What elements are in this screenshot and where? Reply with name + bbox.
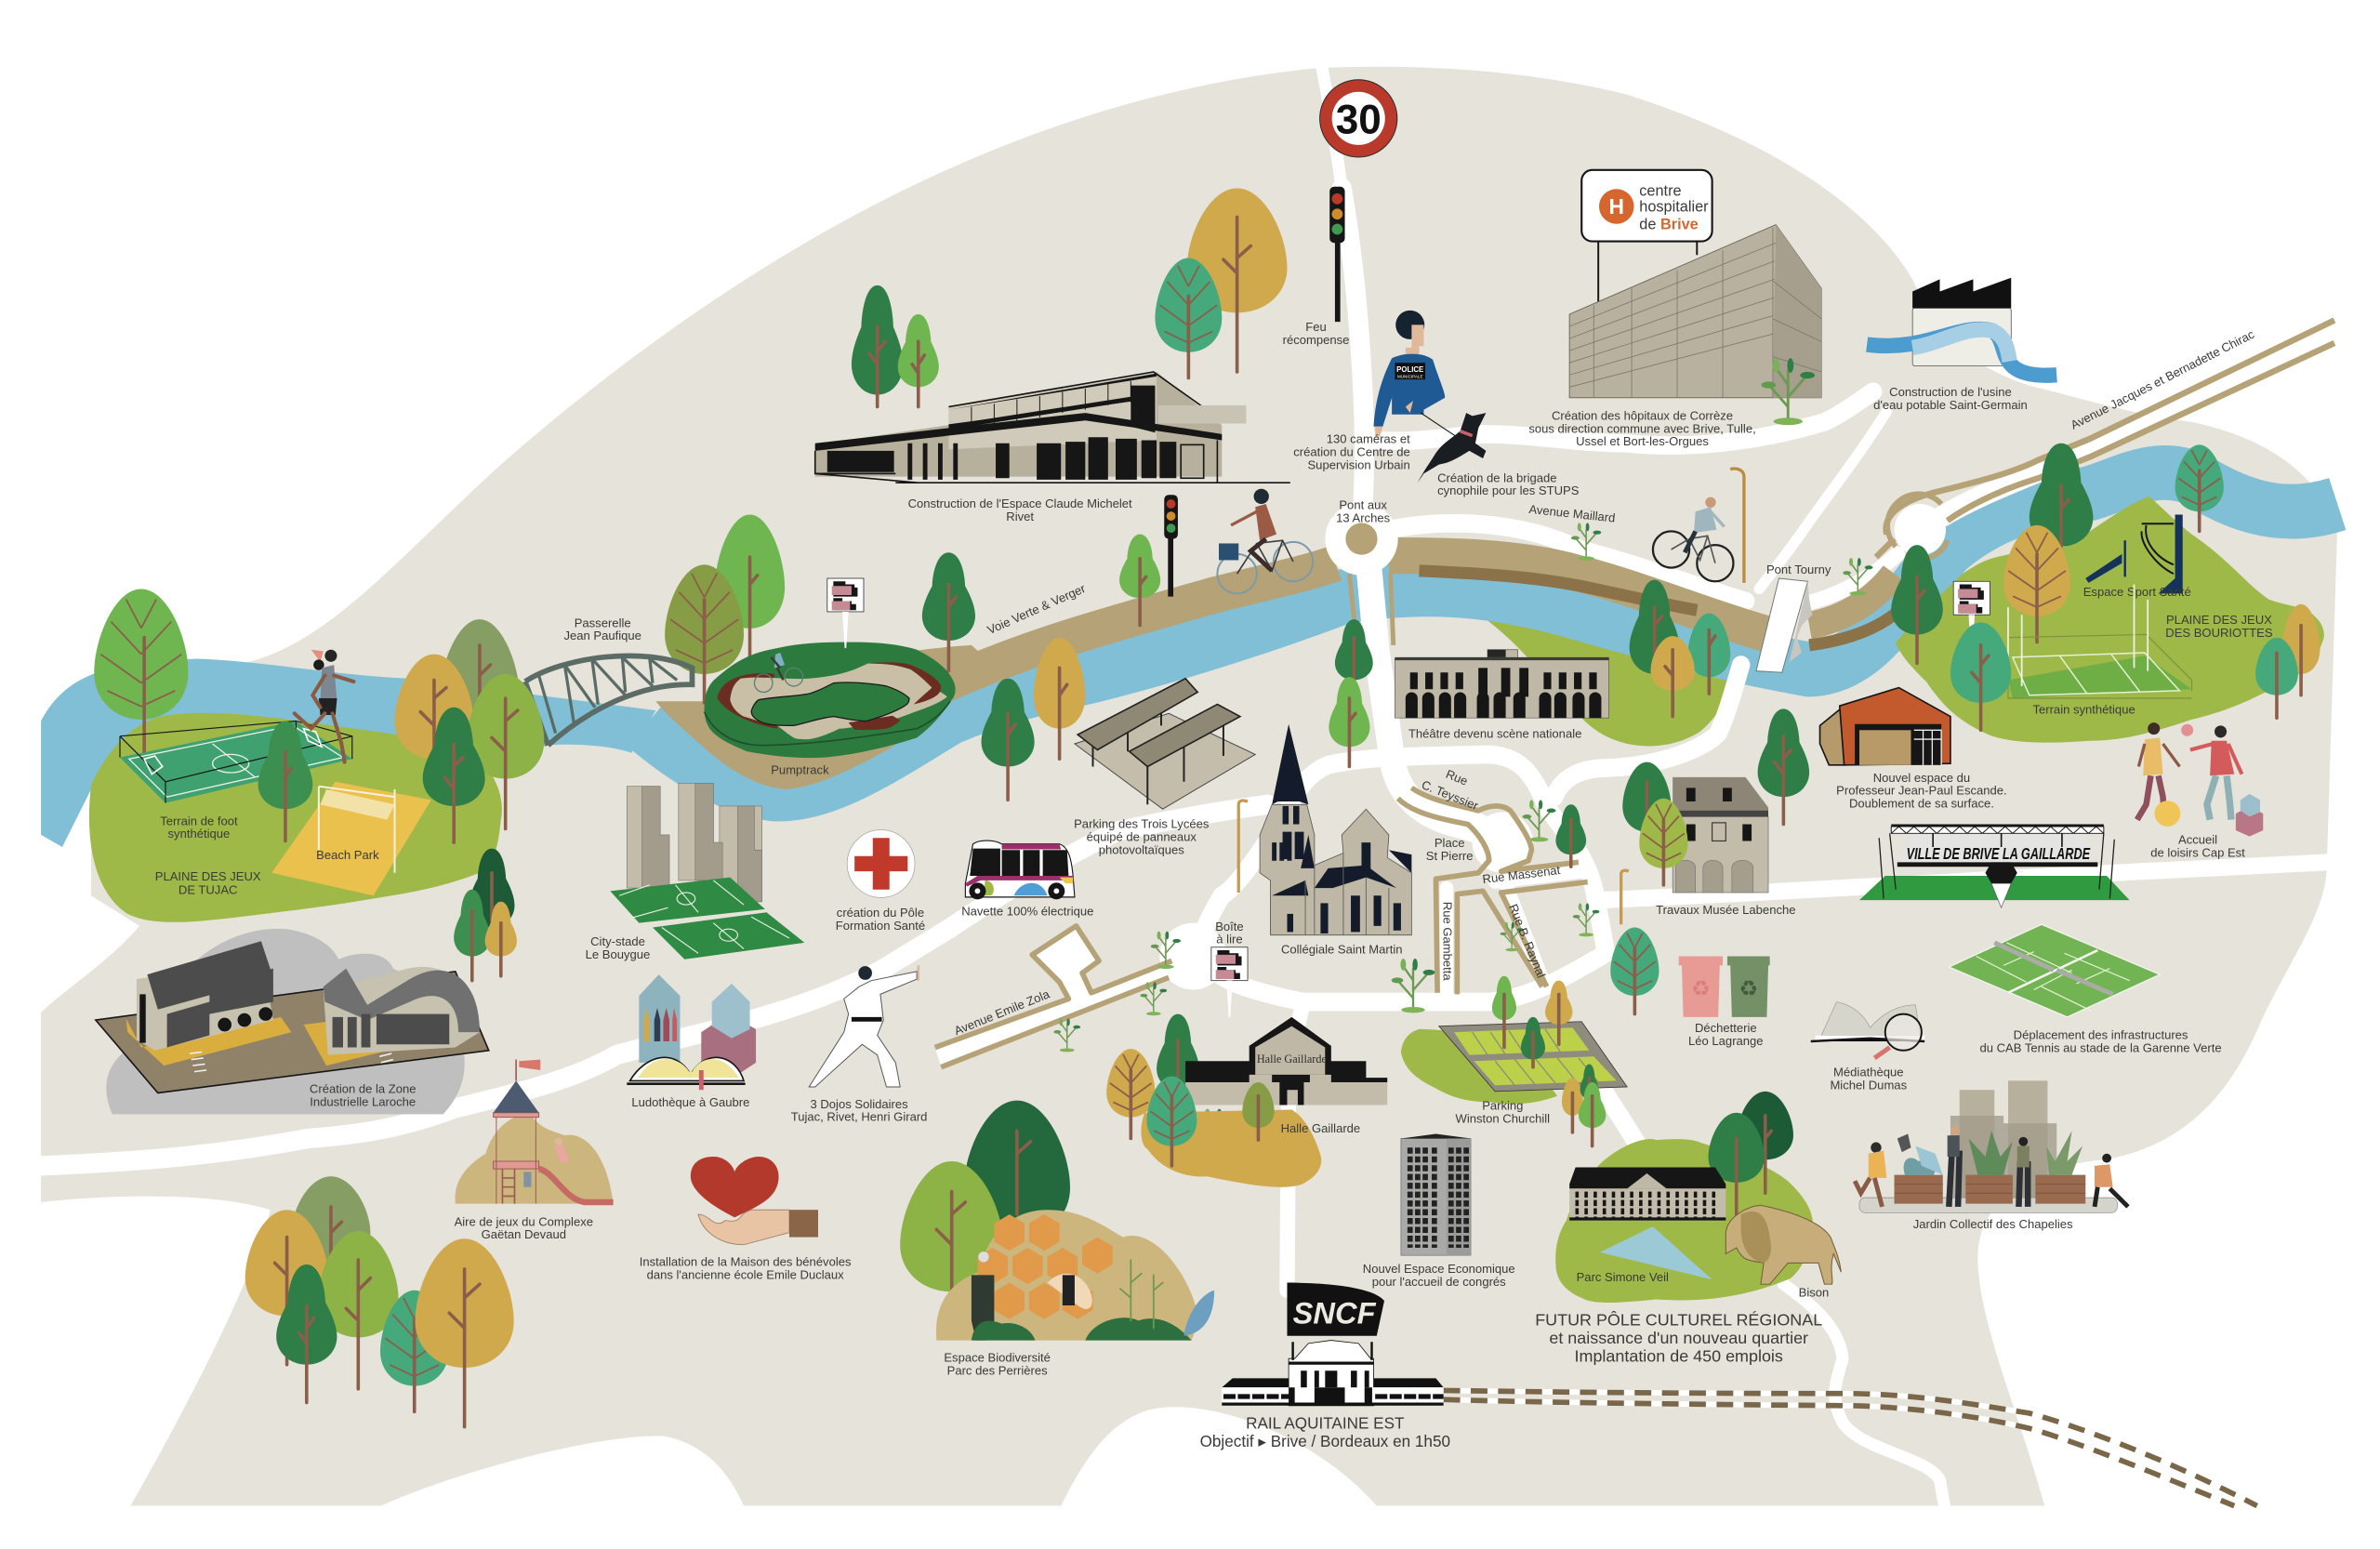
Médiathèque Michel Dumas [1811,1002,1924,1092]
water plant Saint-Germain: d'eau potable Saint-Germain [1873,398,2028,412]
tree [440,619,520,744]
tree [900,1161,1003,1291]
boîte à lire sign [827,578,864,648]
Espace Biodiversité Parc des Perrières: Parc des Perrières [947,1363,1048,1377]
Nouvel espace du Professeur Escande: Nouvel espace du [1873,771,1970,785]
label: Plaine des jeux des Bouriottes: DES BOURIOTTES [2165,626,2273,640]
Zone industrielle Laroche: Création de la Zone [310,1081,416,1095]
Nouvel espace du Professeur Escande [1820,688,2007,811]
street labels in the town centre: Rue B. Raynal [1506,902,1549,980]
tree [922,552,975,671]
tree [94,589,188,756]
road label: Avenue Jacques et Bernadette Chirac: Avenue Jacques et Bernadette Chirac [2069,326,2257,432]
tree [1492,976,1516,1048]
tennis courts: Déplacement des infrastructures [2014,1028,2188,1042]
tree [1119,535,1160,626]
beach park: Beach Park [316,848,379,862]
Travaux Musée Labenche: Travaux Musée Labenche [1656,903,1795,917]
plant [1196,1109,1239,1163]
solar parking: Trois Lycées [1074,679,1255,856]
tennis courts: du CAB Tennis au stade de la Garenne Verte [1979,1040,2222,1054]
Halle Gaillarde: Halle Gaillarde [1281,1121,1360,1135]
Collégiale Saint Martin [1260,724,1411,956]
Maison des bénévoles heart and hand: Installation de la Maison des bénévoles [640,1255,852,1269]
street labels in the town centre: St Pierre [1426,849,1474,863]
heading: Futur pôle culturel régional [1535,1309,1822,1365]
theatre [1395,650,1609,740]
tree [1155,258,1222,378]
tree [1106,1049,1155,1138]
tree [1545,981,1572,1044]
heading: Futur pôle culturel régional: et naissance d'un nouveau quartier [1549,1329,1808,1347]
river Corrèze [41,472,2337,847]
police officer and dog: cynophile pour les STUPS [1437,483,1580,497]
street labels in the town centre: Rue Massenat [1482,863,1561,886]
tree [898,314,939,407]
bridge: Pont Tourny [1756,578,1812,672]
tree [1639,799,1687,885]
Centre hospitalier [1528,170,1821,448]
Parking Winston Churchill: Parking [1482,1098,1523,1112]
label: Plaine des jeux des Bouriottes: PLAINE DES JEUX [2166,613,2272,627]
tree [1650,636,1695,717]
police officer and dog: Création de la brigade [1437,470,1557,484]
Avenue Chirac double road and roundabout [1876,320,2334,559]
speed limit sign 30: 30 [1336,98,1382,143]
tree [1580,1064,1598,1099]
tree [1891,545,1943,663]
Centre hospitalier: de Brive [1639,217,1699,233]
railway tracks [1444,1390,2257,1506]
street lamp [1730,469,1744,583]
plant [1140,982,1167,1015]
création du Pôle Formation Santé: Formation Santé [836,919,925,933]
Travaux Musée Labenche [1656,777,1795,917]
police officer and dog: MUNICIPALE [1397,375,1423,379]
tree [715,514,785,669]
tree [1329,677,1369,766]
création du Pôle Formation Santé: création du Pôle [837,906,924,920]
speed limit sign 30 [1320,80,1397,157]
tree [469,849,514,928]
road: Avenue Emile Zola [935,926,1171,1067]
label: Pont aux 13 Arches [1336,498,1391,525]
tree [1610,928,1659,1014]
traffic light [1164,495,1178,597]
Centre hospitalier: centre [1639,183,1682,200]
bridge: Passerelle Jean Paufique [525,616,693,746]
road: Avenue Emile Zola: Avenue Emile Zola [952,986,1052,1038]
Nouvel Espace Economique: Nouvel Espace Economique [1363,1262,1515,1276]
Ludothèque à Gaubre [627,974,756,1109]
Aire de jeux Gaëtan Devaud: Aire de jeux du Complexe [455,1214,593,1228]
Halle Gaillarde green-gold ground [1141,1109,1321,1187]
stade: Ville de Brive la Gaillarde: VILLE DE BRIVE LA GAILLARDE [1907,844,2091,863]
Ludothèque à Gaubre: Ludothèque à Gaubre [631,1095,749,1109]
Nouvel espace du Professeur Escande: Professeur Jean-Paul Escande. [1836,784,2007,798]
Parking Winston Churchill [1439,1022,1627,1125]
tree [423,708,485,842]
green area: plaine de Tujac [89,713,502,922]
green area: plaine des Bouriottes [1896,496,2324,743]
SNCF station: RAIL AQUITAINE EST [1246,1413,1405,1432]
tree [2175,444,2224,531]
tree [245,1210,328,1365]
tree [1242,1082,1275,1140]
Médiathèque Michel Dumas: Michel Dumas [1830,1078,1908,1092]
street labels in the town centre [1420,767,1561,981]
tree [1709,1113,1765,1214]
Centre hospitalier: sous direction commune avec Brive, Tulle, [1528,421,1756,435]
tree [1687,614,1730,694]
Terrain synthétique: Terrain synthétique [2032,702,2135,716]
bison: Bison [1799,1285,1829,1299]
cyclist on Avenue Maillard [1653,497,1733,581]
tree [2255,638,2298,718]
label: Plaine des jeux de Tujac [155,869,261,897]
tree [454,890,490,981]
tree [1758,708,1809,825]
building: parc Simone Veil [1569,1167,1726,1221]
Déchetterie Léo Lagrange: ♻ [1739,976,1758,1000]
tree [467,674,544,828]
police officer and dog: création du Centre de [1293,445,1410,459]
street lamp [1238,801,1248,893]
bridge: Passerelle Jean Paufique: Jean Paufique [563,629,641,642]
tree [1157,1014,1199,1101]
tree [258,721,312,841]
SNCF station [1200,1283,1450,1450]
tree [1950,622,2011,730]
heading: Futur pôle culturel régional: Implantation de 450 emplois [1575,1346,1783,1365]
tree [485,902,517,976]
tree [2282,604,2320,695]
Espace Biodiversité Parc des Perrières [936,1210,1214,1377]
plant [1151,932,1181,969]
street labels in the town centre: Place [1435,836,1464,850]
tree [2003,525,2070,642]
Nouvel Espace Economique: pour l'accueil de congrés [1372,1275,1506,1289]
Boîte à lire [1211,920,1248,1017]
tree [1630,580,1680,674]
label: Plaine des jeux de Tujac: DE TUJAC [178,883,237,897]
SNCF station: SNCF [1293,1296,1377,1331]
City-stade Le Bouygue: City-stade [590,934,645,948]
tree [1622,762,1672,832]
Aire de jeux Gaëtan Devaud [455,1060,614,1241]
Boîte à lire at Bouriottes [1953,581,1990,651]
pumptrack: Pumptrack [771,763,829,777]
police officer and dog: POLICE [1396,365,1423,374]
Espace Sport Santé: Espace Sport Santé [2083,585,2191,599]
3 Dojos Solidaires: 3 Dojos Solidaires [811,1097,908,1111]
Espace Sport Santé [2083,514,2191,599]
street labels in the town centre: Rue Gambetta [1441,902,1455,981]
bridge: Passerelle Jean Paufique: Passerelle [575,616,631,629]
police officer and dog: Supervision Urbain [1307,457,1410,471]
Halle Gaillarde [1185,1017,1387,1135]
street labels in the town centre: Rue [1444,767,1470,788]
label: Plaine des jeux de Tujac: PLAINE DES JEUX [155,869,261,883]
Parc Simone Veil [1555,1139,1813,1303]
traffic light: feu récompense: Feu [1305,320,1327,334]
Parking Winston Churchill: Winston Churchill [1456,1111,1550,1125]
traffic light: feu récompense [1283,187,1349,347]
foot field Tujac: Terrain de foot [160,814,238,827]
tree [1146,1077,1197,1166]
Centre hospitalier: hospitalier [1639,199,1709,216]
tree [416,1238,514,1427]
solar parking: Trois Lycées: photovoltaïques [1099,842,1184,856]
Déchetterie Léo Lagrange: ♻ [1691,976,1711,1000]
plant [1573,903,1599,936]
building: Espace Claude Michelet Rivet: Construction de l'Espace Claude Michelet [908,496,1132,510]
Jardin Collectif des Chapelies: Jardin Collectif des Chapelies [1913,1217,2073,1231]
Déchetterie Léo Lagrange [1679,957,1770,1048]
tree [1562,1078,1583,1132]
heading: Futur pôle culturel régional: FUTUR PÔLE CULTUREL RÉGIONAL [1535,1309,1822,1329]
solar parking: Trois Lycées: équipé de panneaux [1087,829,1197,843]
solar parking: Trois Lycées: Parking des Trois Lycées [1074,817,1210,831]
police officer and dog: 130 caméras et [1327,432,1410,446]
tree [1335,619,1373,680]
label: Plaine des jeux des Bouriottes [2165,613,2273,640]
Jardin Collectif des Chapelies [1855,1080,2128,1231]
label: Pont aux 13 Arches: 13 Arches [1336,511,1391,525]
3 Dojos Solidaires: Tujac, Rivet, Henri Girard [791,1110,927,1124]
Zone industrielle Laroche [96,929,489,1114]
plant [1501,922,1524,951]
création du Pôle Formation Santé [836,830,925,933]
Boîte à lire: à lire [1216,933,1243,947]
Déchetterie Léo Lagrange: Léo Lagrange [1688,1034,1764,1048]
Nouvel espace du Professeur Escande: Doublement de sa surface. [1849,797,1994,811]
street labels in the town centre: C. Teyssier [1420,777,1481,813]
foot field Tujac: synthétique [168,827,230,841]
plant [1571,523,1601,561]
Centre hospitalier: H [1609,194,1624,218]
green area: parking Churchill [1401,1029,1557,1104]
tree [964,1101,1070,1238]
tree [318,1231,399,1389]
tree [291,1176,370,1264]
tree [1187,188,1287,372]
navette électrique: Navette 100% électrique [961,904,1093,918]
tree [1034,638,1085,759]
City-stade Le Bouygue: Le Bouygue [586,947,650,961]
tree [1555,804,1586,867]
tree [665,564,744,703]
building: Espace Claude Michelet Rivet: Rivet [1006,510,1034,523]
tree [1579,1082,1606,1146]
Déchetterie Léo Lagrange: Déchetterie [1695,1021,1757,1035]
street lamp [1621,870,1629,924]
tree [276,1264,337,1403]
bison [1726,1205,1841,1299]
Accueil de loisirs Cap Est: Accueil [2178,833,2217,847]
pumptrack [705,642,956,777]
Maison des bénévoles heart and hand: dans l'ancienne école Emile Duclaux [647,1267,844,1281]
water plant Saint-Germain [1867,278,2056,412]
cyclist on Voie Verte [1217,489,1313,593]
SNCF station: Objectif ▸ Brive / Bordeaux en 1h50 [1200,1432,1450,1450]
foot field Tujac [120,721,352,841]
tree [380,1291,448,1411]
plant [1843,558,1873,595]
Accueil de loisirs Cap Est: de loisirs Cap Est [2150,846,2245,860]
tree [2030,444,2093,547]
tree [395,655,473,759]
plant [1523,800,1555,841]
tree [1738,1092,1793,1193]
label: Voie Verte et Verger: Voie Verte & Verger [985,581,1088,637]
Médiathèque Michel Dumas: Médiathèque [1833,1066,1904,1079]
ground: pumptrack base [655,645,985,789]
road label: Avenue Maillard: Avenue Maillard [1528,502,1616,525]
Voie Verte and Pont aux 13 Arches [941,502,1896,686]
Espace Biodiversité Parc des Perrières: Espace Biodiversité [944,1350,1051,1364]
stade: Ville de Brive la Gaillarde [1859,825,2130,907]
Centre hospitalier: Ussel et Bort-les-Orgues [1576,434,1709,448]
plant icon near hospital [1762,358,1815,425]
label: Pont Tourny: Pont Tourny [1766,563,1831,576]
tree [982,679,1035,800]
Nouvel Espace Economique [1363,1134,1515,1289]
tree [852,285,903,407]
label: Pont aux 13 Arches: Pont aux [1339,498,1387,512]
Parc Simone Veil: Parc Simone Veil [1577,1270,1669,1284]
City-stade Le Bouygue [586,783,804,961]
3 Dojos Solidaires [791,965,927,1124]
Maison des bénévoles heart and hand [640,1157,852,1281]
building: Espace Claude Michelet Rivet [815,372,1290,523]
tree [1521,1017,1545,1067]
plant [1053,1018,1080,1052]
Zone industrielle Laroche: Industrielle Laroche [310,1094,416,1108]
beach park [271,782,431,895]
green area: theatre park [1480,607,1734,746]
Collégiale Saint Martin: Collégiale Saint Martin [1281,942,1403,956]
Centre hospitalier: Création des hôpitaux de Corrèze [1552,408,1733,422]
Boîte à lire: Boîte [1215,920,1244,933]
Aire de jeux Gaëtan Devaud: Gaëtan Devaud [482,1227,566,1241]
police officer and dog [1293,311,1580,497]
traffic light: feu récompense: récompense [1283,333,1349,347]
Terrain synthétique [2008,585,2192,716]
plant [1392,959,1435,1013]
water plant Saint-Germain: Construction de l'usine [1889,385,2012,399]
tennis courts [1949,924,2222,1054]
navette électrique [961,841,1093,918]
central tan streets [1398,788,1588,994]
theatre: Théâtre devenu scène nationale [1408,726,1581,740]
Halle Gaillarde: Halle Gaillarde [1257,1053,1327,1066]
Accueil de loisirs Cap Est [2137,722,2263,860]
runner [295,650,353,762]
